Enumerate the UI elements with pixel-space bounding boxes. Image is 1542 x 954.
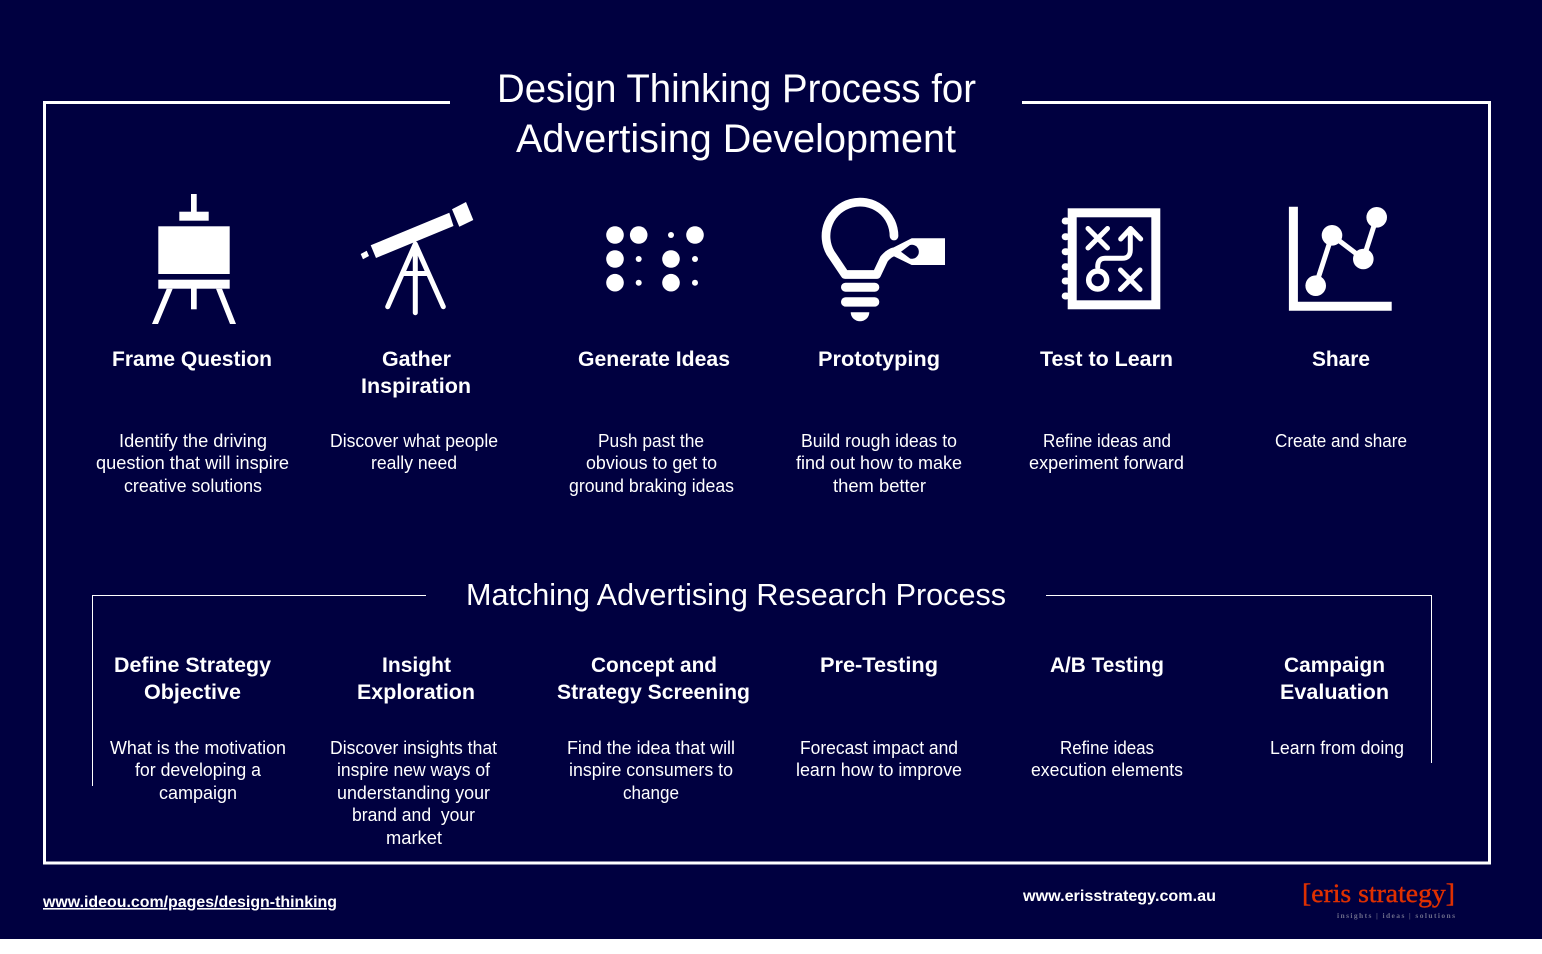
outer frame: [44, 102, 1490, 863]
research: pre-testing: [796, 654, 962, 780]
research: define strategy objective: Objective: [144, 681, 241, 704]
research: insight exploration: market: [386, 828, 442, 848]
step: prototyping: find out how to make: [796, 453, 962, 473]
research: insight exploration: Exploration: [357, 681, 475, 704]
research: campaign evaluation: [1270, 654, 1404, 758]
step: gather inspiration: Discover what people: [330, 431, 498, 451]
research: a/b testing: Refine ideas: [1060, 738, 1154, 758]
step: frame question: question that will inspire: [96, 453, 289, 473]
title: Design Thinking Process for: [497, 67, 976, 111]
research: concept and strategy screening: Find the idea that will: [567, 738, 735, 758]
step: prototyping: them better: [833, 476, 926, 496]
icon: idea dots: [606, 226, 704, 292]
step: generate ideas: [569, 348, 734, 496]
research: campaign evaluation: Learn from doing: [1270, 738, 1404, 758]
research: a/b testing: [1031, 654, 1183, 780]
step: frame question: Identify the driving: [119, 431, 267, 451]
title: [497, 67, 976, 161]
step: generate ideas: ground braking ideas: [569, 476, 734, 496]
icon: line chart: [1293, 207, 1392, 306]
icon: easel: [152, 194, 236, 324]
step: frame question: [96, 348, 289, 496]
research: define strategy objective: What is the motivation: [110, 738, 286, 758]
research: define strategy objective: for developing a: [135, 760, 262, 780]
research: insight exploration: inspire new ways of: [337, 760, 491, 780]
step: gather inspiration: Gather: [382, 348, 451, 371]
logo: eris strategy: insights | ideas | solutions: [1337, 911, 1455, 920]
step: test to learn: [1029, 348, 1184, 473]
research: campaign evaluation: Campaign: [1284, 654, 1385, 677]
logo: eris strategy: [eris strategy]: [1302, 879, 1455, 908]
step: gather inspiration: Inspiration: [361, 375, 471, 398]
step: gather inspiration: really need: [371, 453, 457, 473]
research: a/b testing: execution elements: [1031, 760, 1183, 780]
section heading: Matching Advertising Research Process: [466, 577, 1006, 612]
step: generate ideas: obvious to get to: [586, 453, 717, 473]
icon: telescope: [361, 202, 473, 313]
research: concept and strategy screening: [557, 654, 750, 803]
step: generate ideas: Generate Ideas: [578, 348, 730, 371]
step: gather inspiration: [330, 348, 498, 473]
research: define strategy objective: Define Strategy: [114, 654, 271, 677]
research: concept and strategy screening: Concept and: [591, 654, 717, 677]
step: test to learn: Test to Learn: [1040, 348, 1173, 371]
icon: strategy notebook: [1062, 213, 1156, 305]
research: define strategy objective: campaign: [159, 783, 237, 803]
research: campaign evaluation: Evaluation: [1280, 681, 1389, 704]
research: insight exploration: Discover insights that: [330, 738, 497, 758]
research: pre-testing: Pre-Testing: [820, 654, 938, 677]
inner research frame: [92, 596, 1432, 786]
logo: eris strategy: [1302, 879, 1455, 920]
research: a/b testing: A/B Testing: [1050, 654, 1164, 677]
icon: light bulb with tag: [826, 202, 945, 321]
source link: www.ideou.com/pages/design-thinking: [42, 894, 337, 911]
step: share: Create and share: [1275, 431, 1407, 451]
step: test to learn: experiment forward: [1029, 453, 1184, 473]
research: pre-testing: Forecast impact and: [800, 738, 958, 758]
website link: www.erisstrategy.com.au: [1022, 888, 1216, 905]
step: generate ideas: Push past the: [598, 431, 704, 451]
step: test to learn: Refine ideas and: [1043, 431, 1171, 451]
step: frame question: creative solutions: [124, 476, 262, 496]
research: insight exploration: understanding your: [337, 783, 490, 803]
research: define strategy objective: [110, 654, 286, 803]
title: Advertising Development: [516, 117, 956, 161]
step: frame question: Frame Question: [112, 348, 272, 371]
research: insight exploration: Insight: [382, 654, 451, 677]
step: share: Share: [1312, 348, 1370, 371]
research: insight exploration: brand and your: [352, 805, 475, 825]
step: share: [1275, 348, 1407, 451]
step: prototyping: Build rough ideas to: [801, 431, 957, 451]
research: concept and strategy screening: change: [623, 783, 679, 803]
research: insight exploration: [330, 654, 497, 848]
step: prototyping: Prototyping: [818, 348, 940, 371]
research: concept and strategy screening: inspire consumers to: [569, 760, 733, 780]
step: prototyping: [796, 348, 962, 496]
research: pre-testing: learn how to improve: [796, 760, 962, 780]
research: concept and strategy screening: Strategy Screening: [557, 681, 750, 704]
